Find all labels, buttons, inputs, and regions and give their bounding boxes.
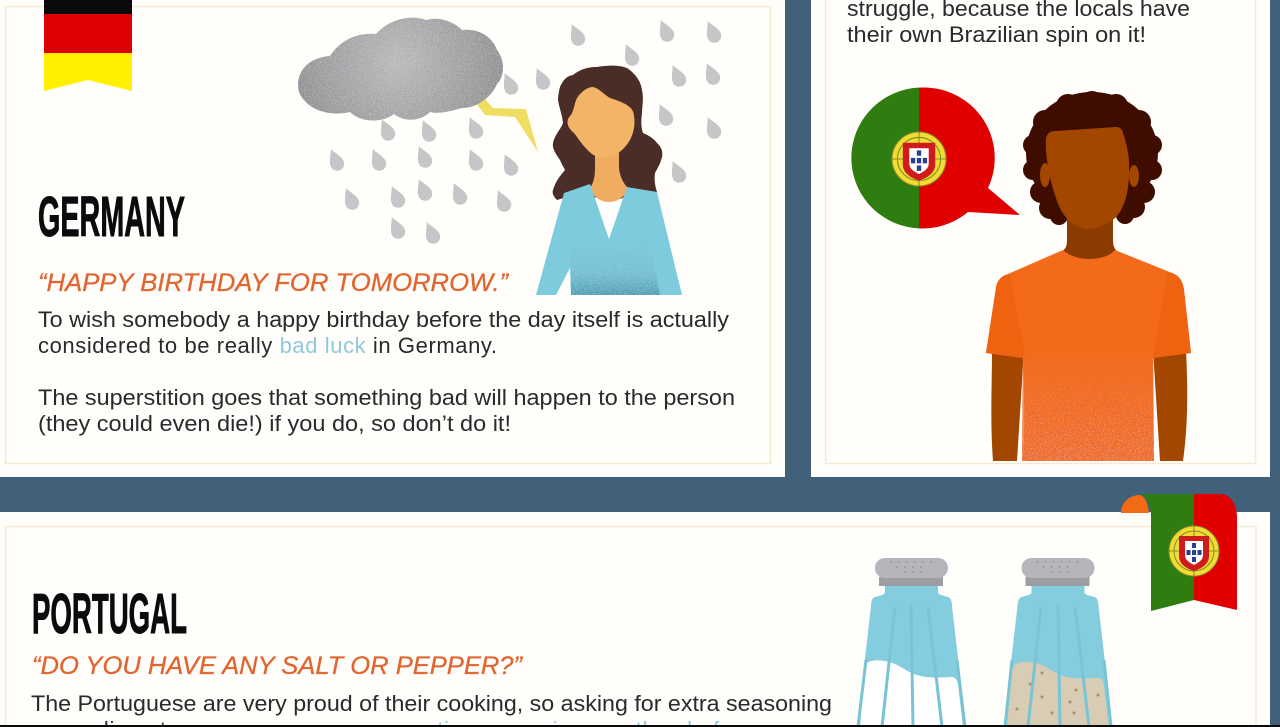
ears xyxy=(1040,163,1050,187)
cardigan shading xyxy=(570,240,660,295)
text block: Germany description: The superstition goes that something bad will happen to the person xyxy=(38,385,735,410)
cardigan xyxy=(536,184,682,295)
t-shirt xyxy=(986,250,1191,461)
icon: pepper shaker xyxy=(1004,558,1112,727)
quote: Portugal: “DO YOU HAVE ANY SALT OR PEPPER?” xyxy=(32,652,524,680)
illustration: man xyxy=(986,91,1191,461)
hair xyxy=(553,66,662,200)
panel: Germany xyxy=(0,0,785,477)
neck xyxy=(1062,218,1118,260)
face xyxy=(567,87,634,157)
illustration: woman xyxy=(536,66,682,295)
icon: rain drops xyxy=(324,17,723,246)
black bottom edge xyxy=(0,725,1280,727)
text block: Germany description xyxy=(38,307,735,436)
icon: German flag ribbon xyxy=(44,0,132,91)
text block: Brazil description xyxy=(847,0,1190,47)
white shirt xyxy=(592,197,624,240)
heading: Germany: GERMANY xyxy=(38,185,185,249)
text block: Portugal description xyxy=(31,691,832,727)
panel: Portugal: PORTUGAL xyxy=(32,582,187,646)
t-shirt shading xyxy=(1022,340,1154,461)
icon: storm cloud xyxy=(298,18,503,121)
hair xyxy=(1023,91,1162,225)
neck xyxy=(590,148,628,202)
panel: Portugal xyxy=(0,494,1270,727)
face xyxy=(1046,127,1129,229)
text block: Germany description: considered to be really bad luck in Germany. xyxy=(38,333,497,358)
sleeves xyxy=(986,272,1191,358)
text block: Germany description: To wish somebody a happy birthday before the day itself is actually xyxy=(38,307,729,332)
text block: Germany description: (they could even die!) if you do, so don’t do it! xyxy=(38,411,511,436)
quote: Germany: “HAPPY BIRTHDAY FOR TOMORROW.” xyxy=(38,269,510,297)
arms xyxy=(991,350,1187,461)
icon: Portuguese speech bubble xyxy=(851,88,1020,228)
icon: Portuguese flag ribbon xyxy=(1121,494,1237,611)
icon: lightning bolt xyxy=(476,93,538,152)
panel: Brazil xyxy=(811,0,1270,477)
text block: Brazil description: their own Brazilian spin on it! xyxy=(847,22,1146,47)
text block: Portugal description: The Portuguese are very proud of their cooking, so asking for extra seasoning xyxy=(31,691,832,716)
icon: salt shaker xyxy=(857,558,966,727)
